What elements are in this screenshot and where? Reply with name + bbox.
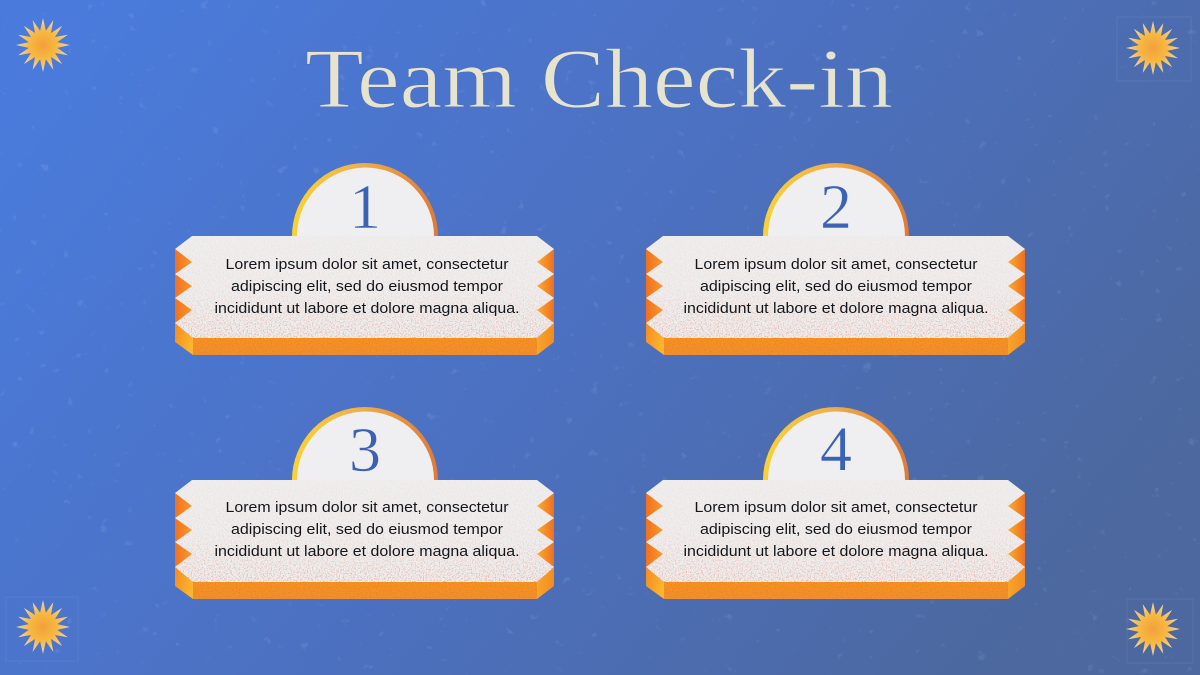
number badge 1 xyxy=(292,163,438,242)
text block 3: incididunt ut labore et dolore magna aliqua. xyxy=(214,544,520,560)
number badge 2 xyxy=(763,163,909,242)
card 3 xyxy=(174,480,555,599)
number badge 3: 3 xyxy=(349,414,381,485)
number badge 3 xyxy=(292,407,438,485)
text block 1: Lorem ipsum dolor sit amet, consectetur xyxy=(226,257,509,273)
panel: check-in 3 xyxy=(174,407,555,599)
number badge 4 xyxy=(763,407,909,484)
text block 4: Lorem ipsum dolor sit amet, consectetur xyxy=(694,500,978,516)
card 1 xyxy=(174,236,555,355)
number badge 4: 4 xyxy=(820,413,852,484)
number badge 1: 1 xyxy=(349,171,381,242)
title: Team Check-in xyxy=(305,32,893,126)
number badge 2: 2 xyxy=(820,171,852,242)
text block 3: adipiscing elit, sed do eiusmod tempor xyxy=(231,522,503,538)
text block 2: adipiscing elit, sed do eiusmod tempor xyxy=(700,279,972,295)
text block 1: adipiscing elit, sed do eiusmod tempor xyxy=(231,279,503,295)
icon: sun top right xyxy=(1117,17,1191,81)
panel: check-in 4 xyxy=(645,407,1026,599)
panel: check-in 1 xyxy=(174,163,555,355)
icon: sun bottom right xyxy=(1126,599,1193,663)
text block 4: incididunt ut labore et dolore magna aliqua. xyxy=(684,544,988,560)
icon: sun bottom left xyxy=(6,597,78,661)
card 4 xyxy=(645,480,1026,599)
text block 2: incididunt ut labore et dolore magna aliqua. xyxy=(684,301,988,317)
text block 4: adipiscing elit, sed do eiusmod tempor xyxy=(700,522,972,538)
card 2 xyxy=(645,236,1026,355)
text block 2: Lorem ipsum dolor sit amet, consectetur xyxy=(694,257,978,273)
text block 3: Lorem ipsum dolor sit amet, consectetur xyxy=(226,500,509,516)
text block 1: incididunt ut labore et dolore magna aliqua. xyxy=(214,301,520,317)
icon: sun top left xyxy=(16,18,70,72)
panel: check-in 2 xyxy=(645,163,1026,355)
